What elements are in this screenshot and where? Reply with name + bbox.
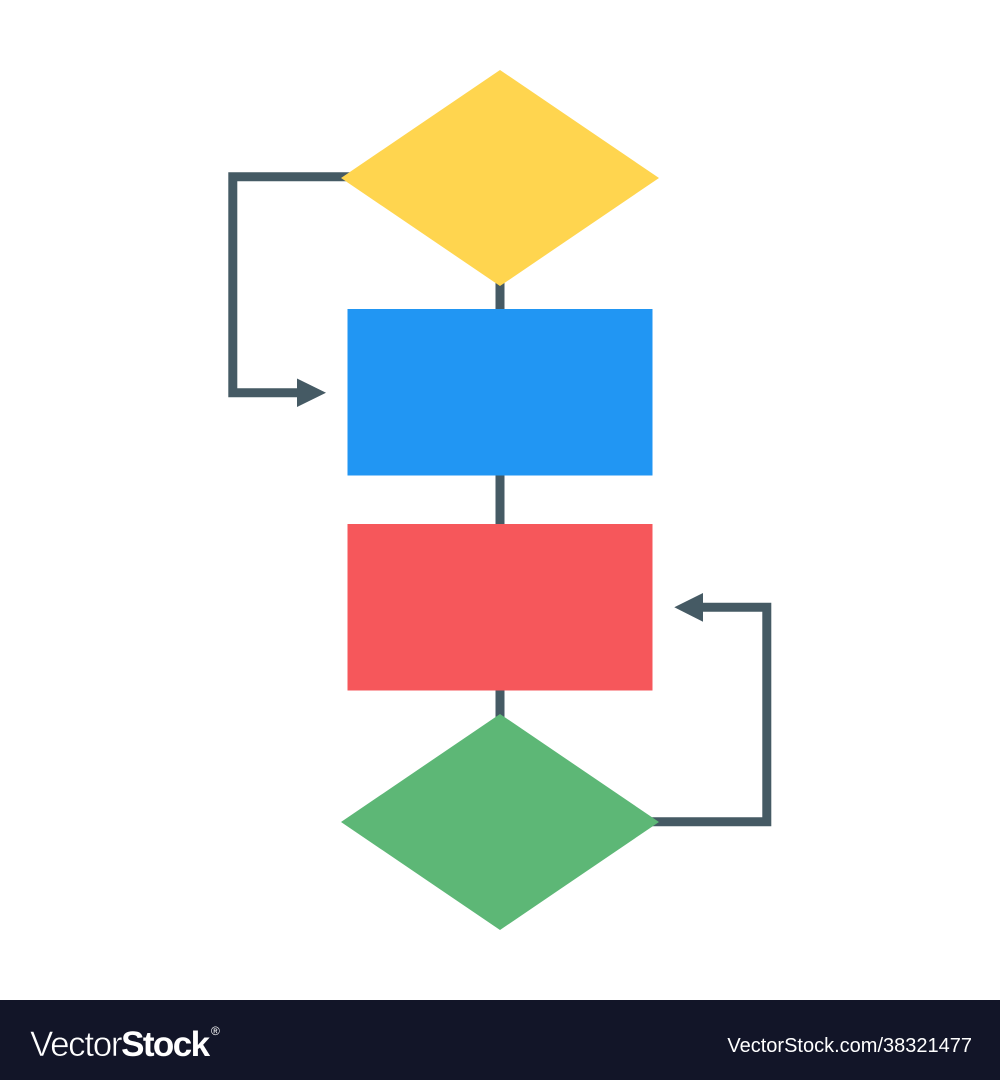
connector: top diamond to blue box — [496, 280, 504, 312]
blue process box — [348, 309, 652, 476]
watermark logo: VectorStock — [30, 1025, 208, 1064]
yellow decision diamond — [341, 70, 659, 286]
image id: VectorStock.com/38321477 — [727, 1035, 972, 1057]
footer bar — [0, 1000, 1000, 1080]
connector: blue box to red box — [496, 474, 504, 526]
green decision diamond — [341, 714, 659, 930]
watermark logo: ® — [211, 1024, 220, 1038]
flowchart diagram — [233, 70, 767, 930]
connector: red box to green diamond — [496, 688, 504, 720]
arrow: left loop from yellow diamond to blue box — [233, 177, 350, 407]
arrow: right loop from green diamond to red box — [650, 593, 767, 822]
red process box — [348, 524, 652, 690]
